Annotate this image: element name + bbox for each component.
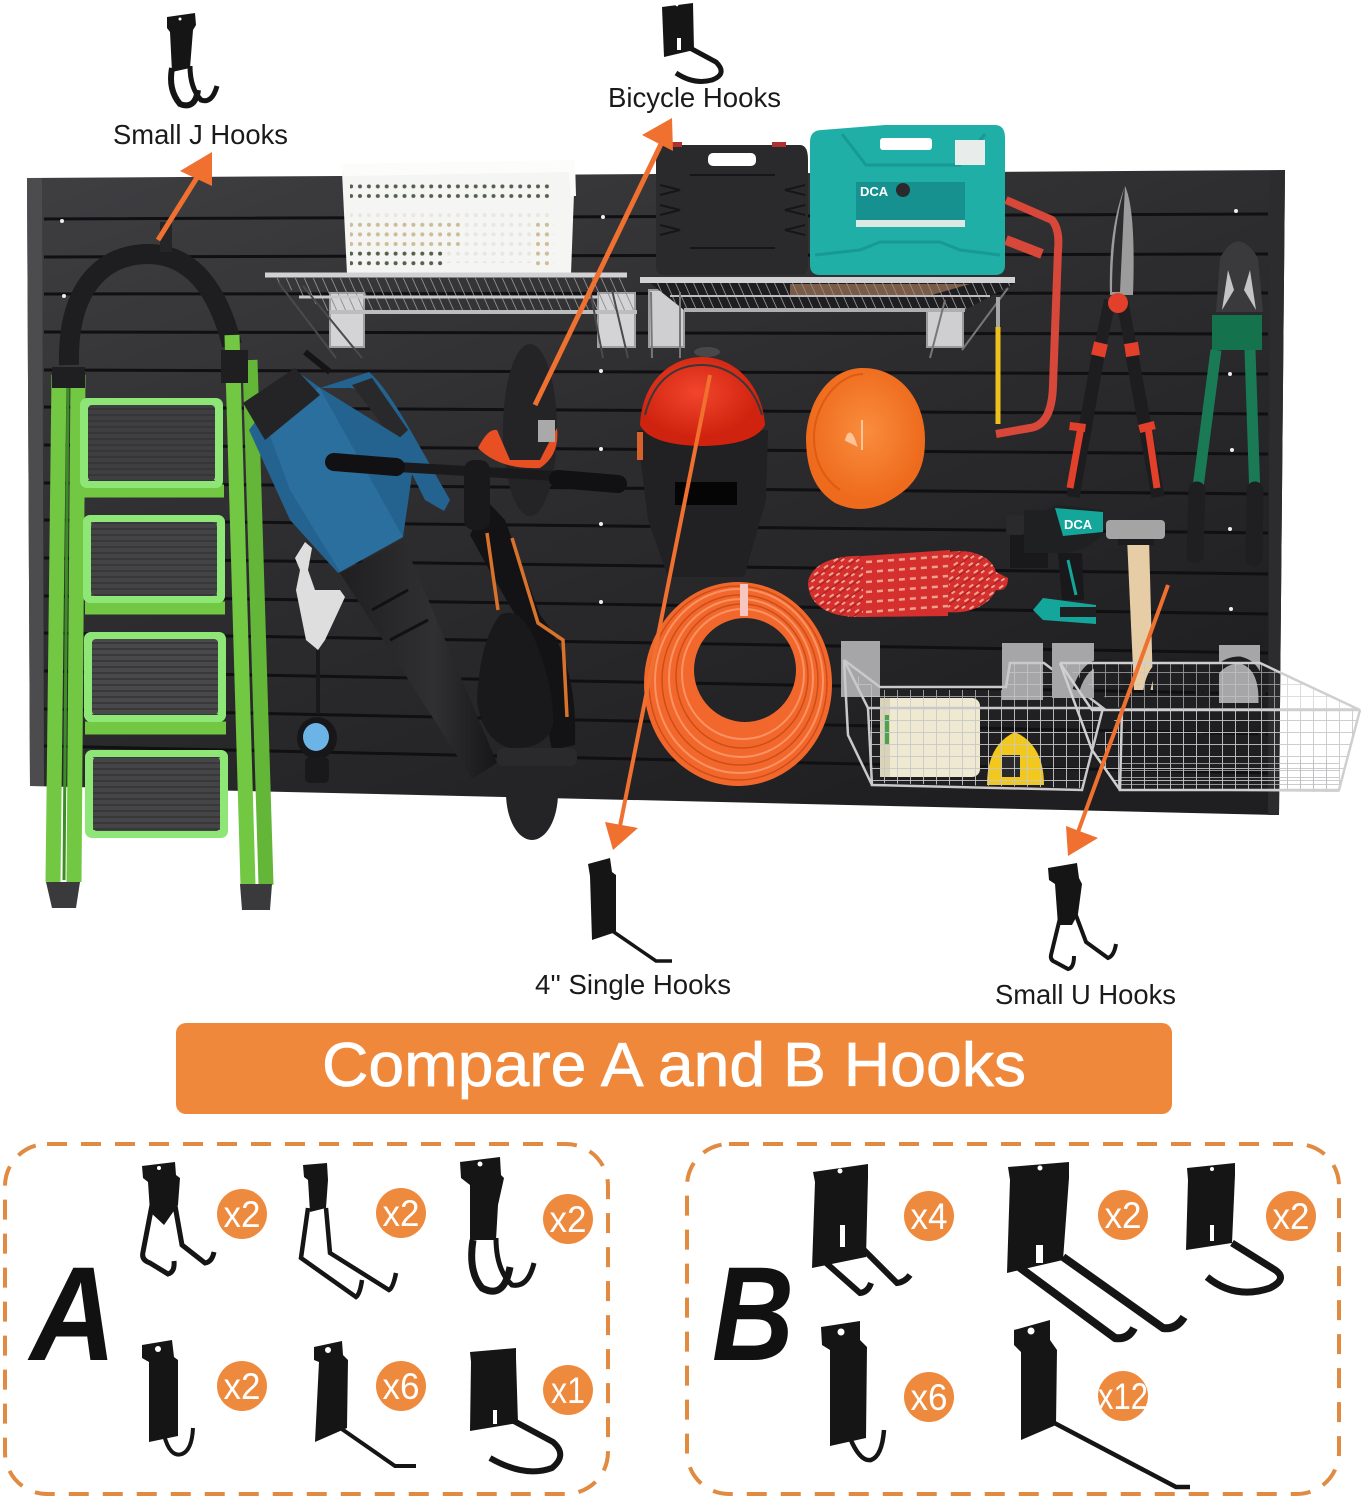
illustration: cordless drill: DCA [1064,517,1093,532]
hook A5: single straight [314,1341,416,1466]
badge x2: x2 [224,1194,260,1235]
illustration: balance bike [334,344,618,840]
label: small U hooks: Small U Hooks [995,979,1176,1010]
badge x12: x12 [1098,1376,1148,1417]
badge x2 [217,1189,267,1239]
letter A: A [27,1240,116,1389]
ladder step 4 [85,750,228,838]
letter B: B [712,1240,794,1389]
icon: small J hook top [167,13,217,105]
label: small J hooks: Small J Hooks [113,119,288,150]
panel: set B [687,1144,1339,1494]
badge x2: x2 [1104,1195,1142,1236]
icon: bicycle hook top [662,3,721,81]
badge x2 [376,1188,426,1238]
panel: slatwall board [27,170,1285,815]
badge x1: x1 [551,1370,585,1411]
badge x2 [1266,1191,1316,1241]
illustration: carabiner and tape measure [295,542,345,783]
badge x2 [543,1194,593,1244]
illustration: green step ladder [46,222,272,910]
badge x4 [904,1191,954,1241]
illustration: teal tool case [810,125,1005,275]
hook A4: single J [142,1340,193,1455]
hook B4: single J [821,1321,884,1460]
label: 4 inch single hooks: 4'' Single Hooks [535,969,731,1000]
badge x1 [543,1365,593,1415]
ladder step 3 [84,632,226,722]
hook B1: small U [812,1164,910,1293]
arrow: to small U hooks [1066,585,1168,856]
ladder step 1 [80,398,223,488]
badge x4: x4 [910,1196,948,1237]
hook B3: bicycle [1186,1163,1281,1292]
badge x6: x6 [382,1366,420,1407]
illustration: teal tool case: DCA [860,184,889,199]
hook B2: large U [1007,1162,1184,1338]
illustration: orange hard hat [806,368,925,509]
badge x2 [217,1361,267,1411]
illustration: bolt cutters [1195,242,1263,558]
arrow: to bicycle hooks [535,118,673,405]
label: bicycle hooks: Bicycle Hooks [608,82,781,113]
ladder step 2 [83,515,225,603]
icon: 4 inch single hook [588,858,672,961]
illustration: orange hose coil [644,582,832,786]
arrow: to 4 inch single hooks [605,375,710,850]
badge x2: x2 [550,1199,586,1240]
badge x6: x6 [910,1377,948,1418]
illustration: wire basket left with tape rolls [841,641,1103,790]
illustration: hacksaw [996,200,1058,434]
badge x2: x2 [382,1193,420,1234]
icon: small U hook [1048,863,1116,969]
illustration: rope coil [808,550,1008,617]
hook A1: small U [142,1162,214,1274]
hook A3: small J [460,1157,534,1291]
illustration: cordless drill [1006,505,1103,624]
badge x2 [1098,1190,1148,1240]
illustration: wire shelf right [640,280,1015,358]
hook A2: large U [301,1163,396,1297]
banner: compare heading: Compare A and B Hooks [322,1031,1026,1100]
illustration: garden loppers [1070,186,1158,497]
badge x2: x2 [224,1366,260,1407]
panel: set A [5,1144,608,1494]
badge x2: x2 [1272,1196,1310,1237]
arrow: to small J hooks [158,152,212,240]
illustration: wire shelf left [265,275,637,358]
illustration: wire basket right with U hooks [1052,643,1360,792]
badge x6 [904,1372,954,1422]
illustration: red helmet with welding mask [637,347,768,577]
illustration: black tool case [656,142,808,275]
illustration: leaf blower [243,352,497,779]
illustration: white storage basket [340,160,576,274]
illustration: hammer [1106,520,1165,690]
hook A6: bicycle [470,1348,560,1471]
banner: compare heading [176,1023,1172,1114]
badge x6 [376,1361,426,1411]
hook B5: long single [1014,1320,1190,1487]
